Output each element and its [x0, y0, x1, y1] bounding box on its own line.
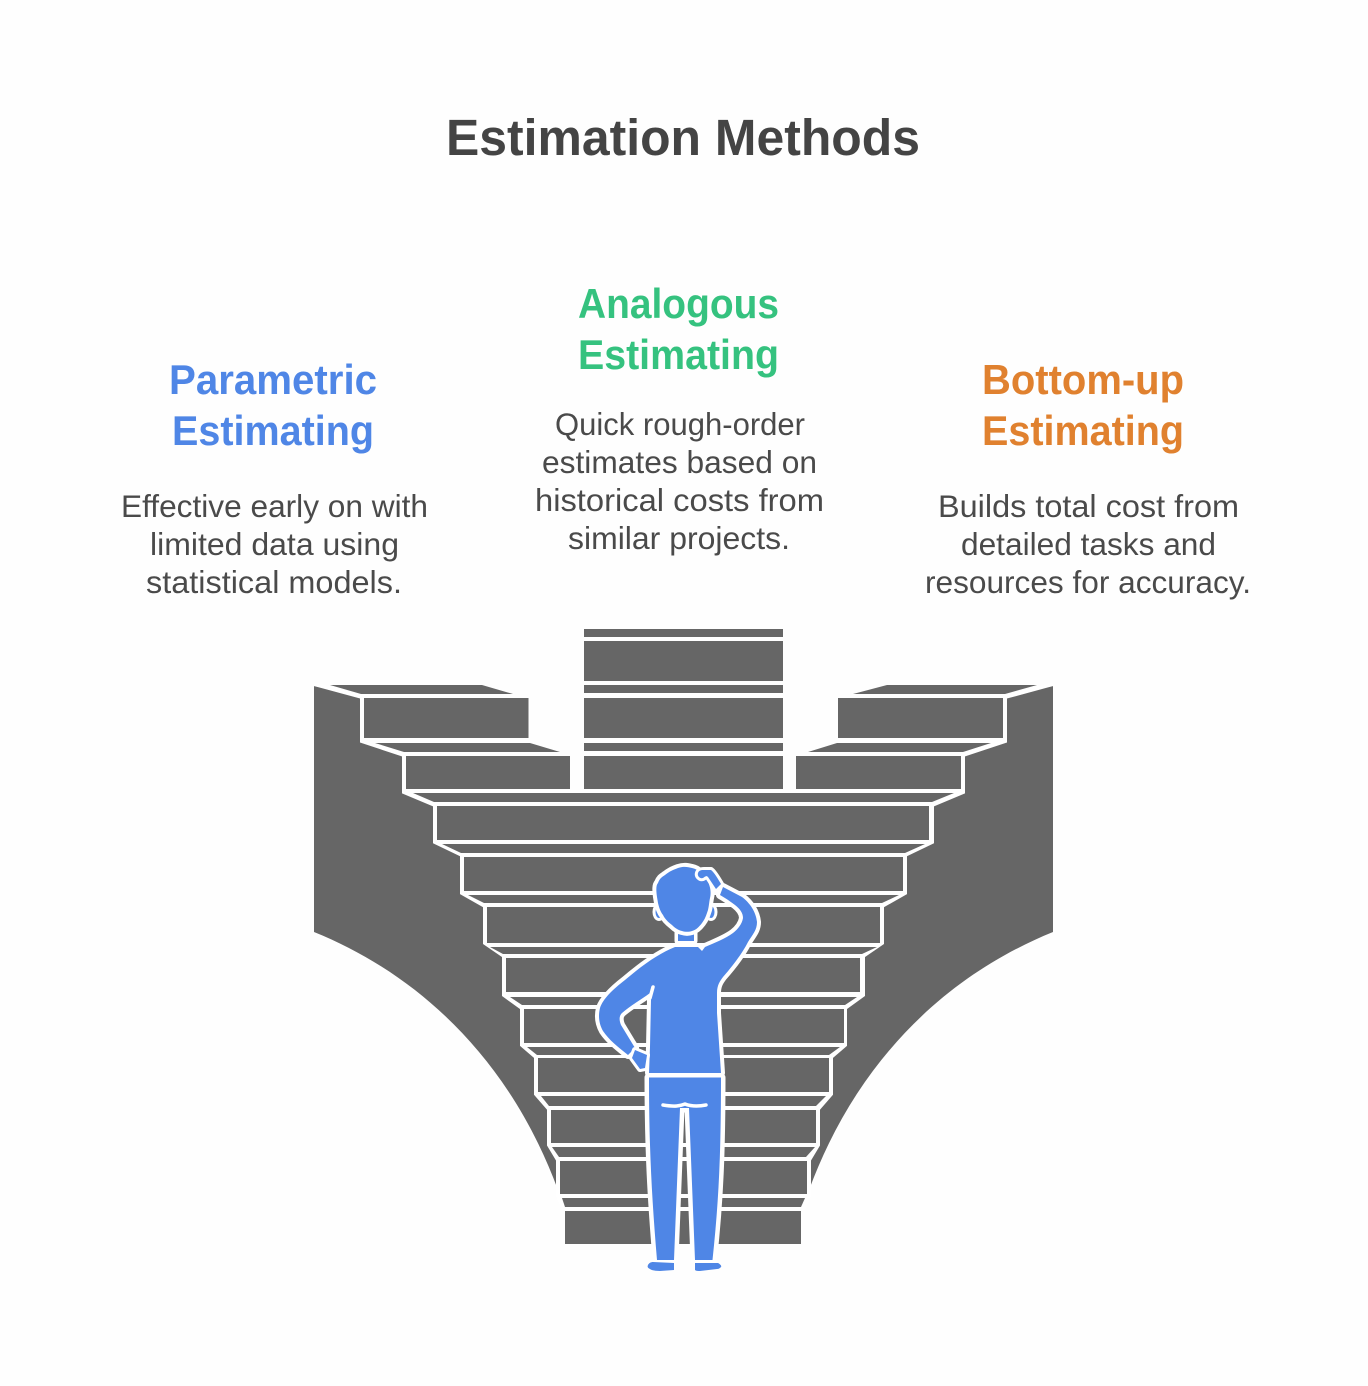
- figure: person scratching head: [599, 867, 757, 1271]
- text: Bottom-up description: [925, 488, 1251, 600]
- upper right steps: [853, 685, 1037, 694]
- text: Bottom-up description: Builds total cost from: [938, 488, 1239, 524]
- text: Parametric description: statistical models.: [146, 564, 402, 600]
- upper left steps: [330, 685, 513, 694]
- text: Analogous description: estimates based on: [542, 444, 817, 480]
- hand on head: [698, 870, 721, 889]
- text: Parametric description: [121, 488, 428, 600]
- text: Analogous description: [535, 406, 824, 556]
- hand on hip: [632, 1050, 647, 1069]
- heading: Parametric Estimating: Parametric: [169, 356, 377, 403]
- column: Parametric Estimating: [121, 356, 428, 600]
- lower steps: [413, 793, 954, 802]
- head: [656, 867, 711, 932]
- torso and arms: [599, 887, 757, 1073]
- heading: Analogous Estimating: Analogous: [578, 280, 779, 327]
- step outlines: [314, 684, 1053, 1210]
- left ear: [656, 906, 662, 918]
- text: Analogous description: similar projects.: [568, 520, 790, 556]
- column: Analogous Estimating: [535, 280, 824, 556]
- column: Bottom-up Estimating: [925, 356, 1251, 600]
- heading: Analogous Estimating: Estimating: [578, 331, 779, 378]
- left leg and right leg: [649, 1078, 721, 1260]
- central tower: [584, 629, 783, 789]
- heading: Bottom-up Estimating: Bottom-up: [982, 356, 1184, 403]
- heading: Bottom-up Estimating: Estimating: [982, 407, 1184, 454]
- heading: Analogous Estimating: [578, 280, 779, 378]
- heading: Parametric Estimating: Estimating: [172, 407, 374, 454]
- right ear: [708, 906, 714, 918]
- step faces and treads: [330, 629, 1037, 1244]
- armpit crease: [650, 987, 653, 998]
- text: Analogous description: historical costs from: [535, 482, 824, 518]
- title: Estimation Methods: [446, 109, 920, 166]
- text: Bottom-up description: detailed tasks and: [961, 526, 1216, 562]
- right foot: [695, 1263, 721, 1271]
- left wall: [314, 686, 558, 1190]
- right wall: [809, 686, 1053, 1190]
- heading: Parametric Estimating: [169, 356, 377, 454]
- crotch crease: [663, 1104, 706, 1106]
- text: Parametric description: limited data using: [150, 526, 399, 562]
- staircase illustration: [314, 629, 1053, 1244]
- heading: Bottom-up Estimating: [982, 356, 1184, 454]
- text: Parametric description: Effective early on with: [121, 488, 428, 524]
- left foot: [648, 1262, 674, 1271]
- neck: [678, 925, 694, 941]
- text: Bottom-up description: resources for accuracy.: [925, 564, 1251, 600]
- text: Analogous description: Quick rough-order: [555, 406, 805, 442]
